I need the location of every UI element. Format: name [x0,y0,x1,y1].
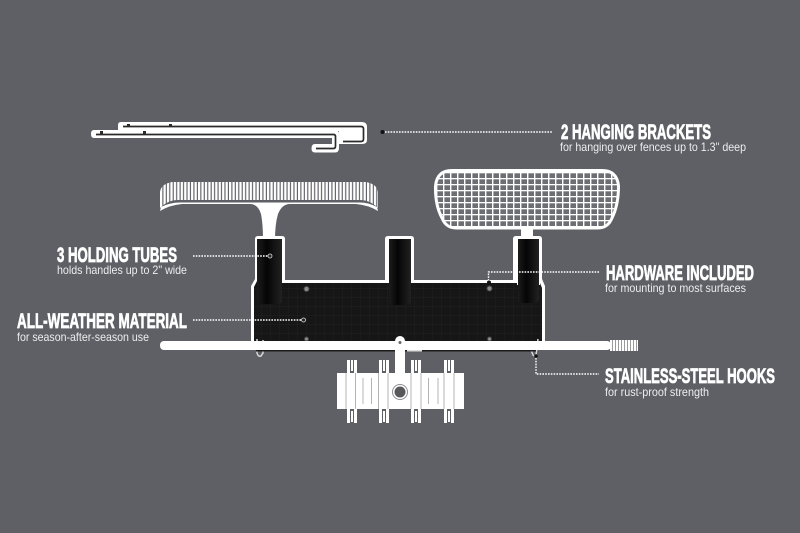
holding tube: left [257,239,282,304]
icon: two hanging brackets [91,122,367,152]
icon: brush head on handle [160,182,378,240]
heading: all-weather material: ALL-WEATHER MATERIAL [17,309,187,333]
leader: all-weather material [193,318,306,322]
organizer rack body [251,229,545,345]
leader: stainless-steel hooks [534,354,599,374]
leader: brackets [380,130,553,134]
text: tubes detail: holds handles up to 2" wide [57,263,187,277]
handle stub: brush [263,232,275,239]
icon: clamp attachment [337,336,464,423]
stainless-steel hooks [257,339,538,356]
icon: long handle with grip [160,340,638,352]
text: material detail: for season-after-season use [17,330,149,344]
holding tube: right [518,239,539,303]
heading: 3 holding tubes: 3 HOLDING TUBES [57,243,177,267]
holding tube: middle [389,239,411,305]
leader: hardware included [487,272,599,284]
heading: 2 hanging brackets: 2 HANGING BRACKETS [561,120,711,144]
handle stub: net [521,229,533,239]
hardware screws [304,286,492,341]
text: hooks detail: for rust-proof strength [605,385,709,399]
icon: mesh net on handle [435,170,618,228]
text: brackets detail: for hanging over fences up to 1.3" deep [560,140,746,154]
leader: holding tubes [193,254,272,258]
text: hardware detail: for mounting to most surfaces [605,281,746,295]
